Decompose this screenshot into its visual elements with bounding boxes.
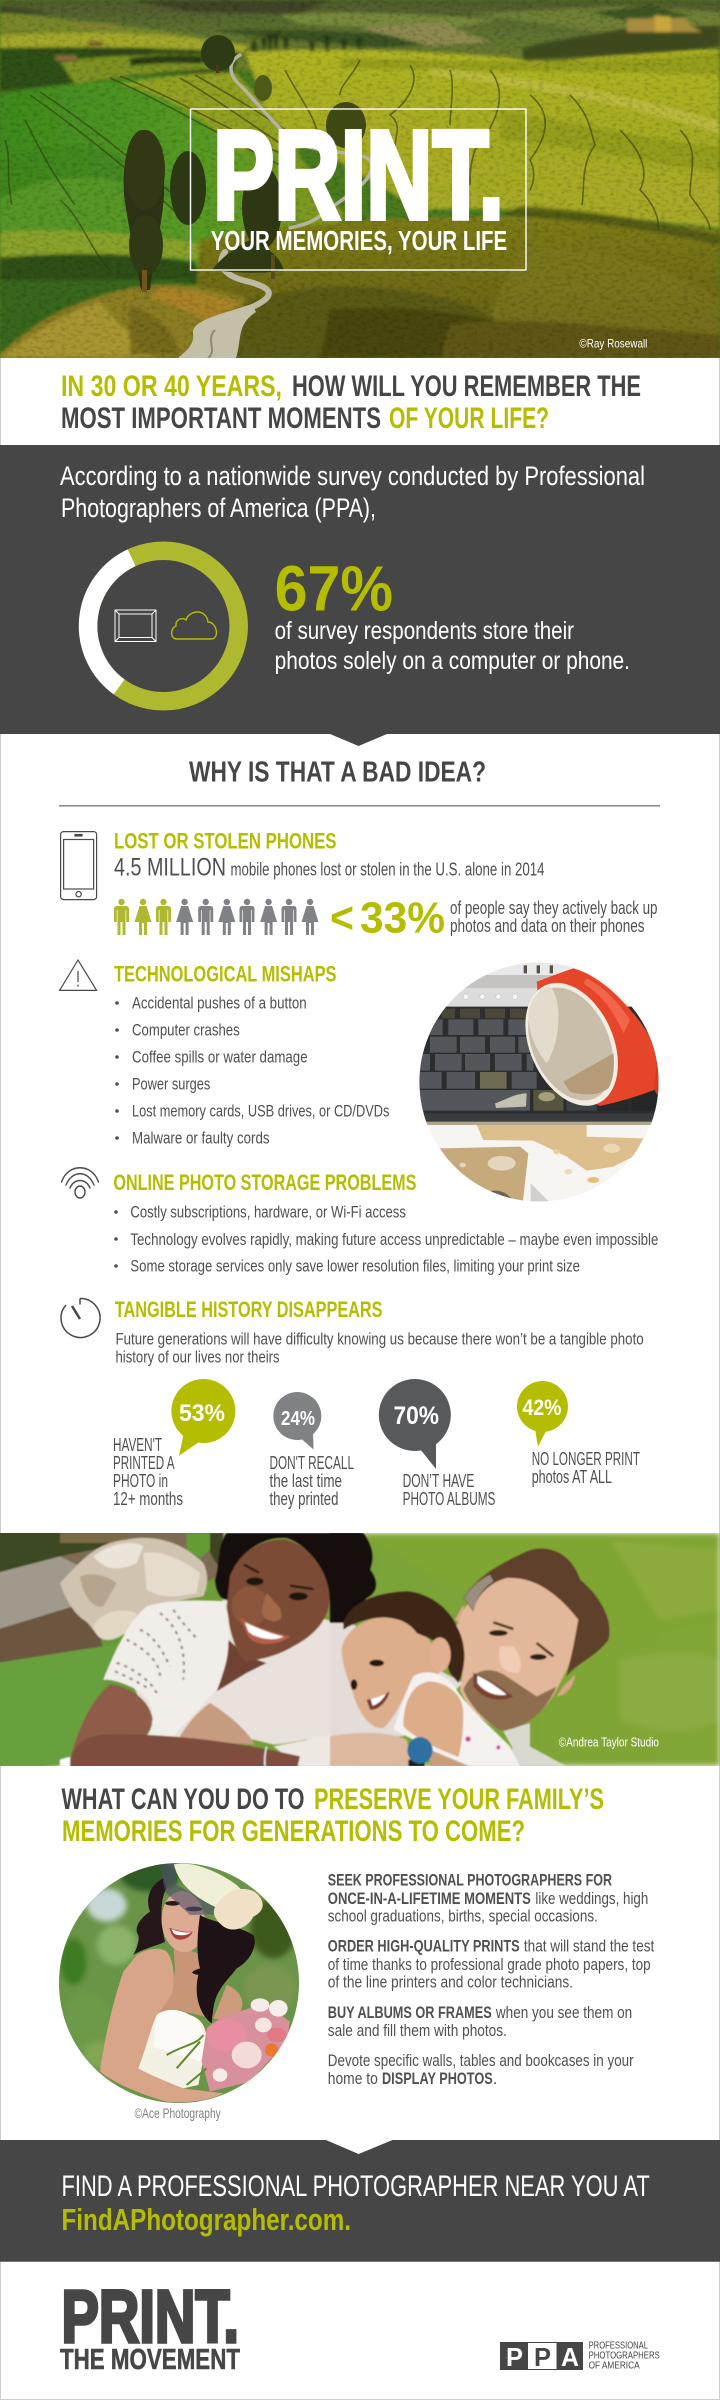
distant house and tree line xyxy=(0,6,720,61)
bullet list xyxy=(114,1204,658,1276)
advice: order high-quality prints: ORDER HIGH-QUALITY PRINTS xyxy=(328,1937,520,1956)
intro question heading xyxy=(61,370,641,435)
speech bubble: 42 percent xyxy=(517,1381,568,1447)
advice: order high-quality prints: that will stand the test xyxy=(524,1937,655,1956)
logo: PPA xyxy=(500,2340,660,2372)
face xyxy=(162,1891,205,1952)
advice: seek professional photographers xyxy=(328,1871,648,1926)
paragraph: history of our lives nor theirs xyxy=(116,1348,280,1367)
stat: 4.5 million phones: mobile phones lost or stolen in the U.S. alone in 2014 xyxy=(230,860,544,880)
logo: Print the Movement: THE MOVEMENT xyxy=(60,2344,240,2376)
survey intro text xyxy=(60,461,645,523)
speech bubble: 24 percent: 24% xyxy=(281,1408,315,1430)
label: 24 percent: DON'T RECALL xyxy=(270,1453,354,1473)
bullet list: Some storage services only save lower resolution files, limiting your print size xyxy=(130,1258,580,1276)
heading: why is that a bad idea: WHY IS THAT A BAD IDEA? xyxy=(189,757,486,789)
section: tangible history disappears xyxy=(61,1297,644,1509)
donut chart: 67 percent xyxy=(88,551,239,701)
speech bubble: 70 percent xyxy=(379,1379,451,1469)
PPA name: PHOTOGRAPHERS xyxy=(589,2350,660,2362)
heading: ONLINE PHOTO STORAGE PROBLEMS xyxy=(113,1170,416,1195)
speech bubble: 53 percent: 53% xyxy=(179,1400,225,1427)
advice: display photos xyxy=(328,2051,634,2088)
advice: buy albums or frames: when you see them on xyxy=(495,2003,632,2022)
photo credit: ©Ace Photography xyxy=(134,2105,221,2121)
photo: bride with bouquet xyxy=(57,1858,300,2105)
label: 70 percent xyxy=(403,1471,495,1509)
icon: photo frame xyxy=(115,610,156,642)
speech bubble: 70 percent: 70% xyxy=(394,1402,439,1430)
PPA name: PROFESSIONAL xyxy=(589,2340,648,2352)
label: 70 percent: PHOTO ALBUMS xyxy=(403,1489,495,1509)
veil xyxy=(160,1863,217,1915)
title frame xyxy=(190,109,526,270)
icon: cloud xyxy=(172,612,216,639)
panel: call to action band xyxy=(0,2140,720,2262)
hair right xyxy=(192,1915,255,2023)
label: 53 percent: PRINTED A xyxy=(113,1453,174,1473)
bullet list: Coffee spills or water damage xyxy=(132,1049,308,1067)
crochet cardigan xyxy=(103,1600,229,1740)
label: 24 percent: the last time xyxy=(270,1471,342,1491)
stat: less than 33 percent: < xyxy=(330,894,354,943)
icon: clock xyxy=(61,1298,100,1337)
rocks and grass behind mother xyxy=(0,1530,223,1773)
PPA letter boxes: A xyxy=(561,2342,579,2372)
mother's sleeve xyxy=(253,1738,306,1746)
bullet list: Malware or faulty cords xyxy=(132,1130,270,1148)
icon: warning triangle xyxy=(60,960,97,990)
label: 70 percent: DON’T HAVE xyxy=(403,1471,474,1491)
clothing backing xyxy=(134,1598,331,1741)
heading: what can you do: MEMORIES FOR GENERATIONS TO COME? xyxy=(62,1815,525,1848)
paragraph xyxy=(116,1330,644,1367)
stat: 4.5 million phones: 4.5 MILLION xyxy=(114,854,226,882)
father xyxy=(455,1549,609,1766)
advice: display photos: home to xyxy=(328,2069,378,2088)
father's arm and watch xyxy=(330,1733,470,1766)
advice: seek professional photographers: SEEK PROFESSIONAL PHOTOGRAPHERS FOR xyxy=(328,1871,612,1890)
shoulder and chest xyxy=(157,1945,213,2018)
intro question heading: IN 30 OR 40 YEARS, xyxy=(61,370,282,403)
label: 53 percent xyxy=(113,1435,183,1509)
stat: less than 33 percent: 33% xyxy=(360,894,445,943)
PPA letter boxes: P xyxy=(506,2342,523,2372)
bullet list xyxy=(115,995,389,1148)
photo: smiling family on grass xyxy=(0,1530,720,1773)
advice: buy albums or frames: BUY ALBUMS OR FRAMES xyxy=(328,2003,492,2022)
label: 53 percent: HAVEN'T xyxy=(113,1435,162,1455)
advice: order high-quality prints: of the line printers and color technicians. xyxy=(328,1973,573,1992)
photo: coffee spilled on keyboard xyxy=(417,960,663,1207)
tractor tracks in the fields xyxy=(5,60,710,270)
statistic caption: photos solely on a computer or phone. xyxy=(275,647,630,675)
bullet list: Lost memory cards, USB drives, or CD/DVDs xyxy=(132,1103,389,1121)
advice: buy albums or frames: sale and fill them with photos. xyxy=(328,2021,507,2040)
bullet list: Costly subscriptions, hardware, or Wi-Fi access xyxy=(130,1204,406,1222)
section: lost or stolen phones xyxy=(61,829,658,943)
speech bubble: 24 percent xyxy=(273,1392,321,1450)
advice: seek professional photographers: school graduations, births, special occasions. xyxy=(328,1907,598,1926)
bullet list: Computer crashes xyxy=(132,1022,240,1040)
heading: what can you do xyxy=(62,1783,604,1848)
advice: display photos: . xyxy=(493,2069,497,2088)
speech bubble: 53 percent xyxy=(171,1379,235,1456)
advice: order high-quality prints xyxy=(328,1937,655,1992)
advice: seek professional photographers: like weddings, high xyxy=(535,1889,648,1908)
cypress trees xyxy=(124,35,366,292)
blurred garden background xyxy=(60,1858,297,2068)
label: 53 percent: PHOTO in xyxy=(113,1471,168,1491)
bouquet xyxy=(167,1998,290,2092)
stat: 4.5 million phones xyxy=(114,854,544,882)
PPA letter boxes xyxy=(500,2342,583,2372)
logo: Print the Movement xyxy=(60,2275,240,2376)
heading: what can you do: PRESERVE YOUR FAMILY’S xyxy=(314,1783,604,1816)
section: online photo storage problems xyxy=(62,1168,658,1276)
dress xyxy=(138,2010,207,2088)
label: 42 percent xyxy=(532,1449,640,1487)
mother xyxy=(0,1530,360,1773)
bullet list: Accidental pushes of a button xyxy=(132,995,307,1013)
photo credit: ©Ray Rosewall xyxy=(579,336,647,350)
heading: what can you do: WHAT CAN YOU DO TO xyxy=(62,1783,304,1816)
label: 42 percent: photos AT ALL xyxy=(532,1467,612,1487)
advice: seek professional photographers: ONCE-IN-A-LIFETIME MOMENTS xyxy=(328,1889,531,1908)
title: PRINT.: PRINT. xyxy=(213,104,504,246)
bullet list: Power surges xyxy=(132,1076,210,1094)
stat caption: photos and data on their phones xyxy=(450,916,645,936)
survey intro text: Photographers of America (PPA), xyxy=(61,493,376,523)
subtitle: YOUR MEMORIES, YOUR LIFE xyxy=(211,225,507,256)
intro question heading: MOST IMPORTANT MOMENTS xyxy=(61,402,381,435)
icon: wifi xyxy=(62,1168,98,1198)
heading: LOST OR STOLEN PHONES xyxy=(114,829,336,854)
section: technological mishaps xyxy=(60,960,663,1207)
hero photo: rolling Tuscan hills with title xyxy=(0,0,720,358)
hat xyxy=(174,1864,241,1907)
label: 24 percent: they printed xyxy=(270,1489,338,1509)
logo: Print the Movement: PRINT. xyxy=(62,2275,239,2358)
PPA name: OF AMERICA xyxy=(589,2360,640,2372)
heading: TECHNOLOGICAL MISHAPS xyxy=(114,962,336,987)
father and toddler xyxy=(330,1533,609,1766)
statistic caption: of survey respondents store their xyxy=(275,617,574,645)
stat caption xyxy=(450,898,658,936)
red mug xyxy=(525,968,658,1106)
advice text block xyxy=(328,1871,655,2088)
panel: survey statistic band xyxy=(0,445,720,746)
toddler xyxy=(342,1591,520,1766)
advice: buy albums or frames xyxy=(328,2003,632,2040)
photo credit: ©Andrea Taylor Studio xyxy=(559,1736,659,1750)
PPA name xyxy=(589,2340,660,2372)
grass background xyxy=(0,1533,720,1766)
icon: phone xyxy=(61,832,97,900)
big 67 percent: 67% xyxy=(275,553,393,625)
pictogram: people, three of ten highlighted xyxy=(114,899,318,935)
label: 24 percent xyxy=(270,1453,354,1509)
speech bubble: 42 percent: 42% xyxy=(522,1395,562,1420)
statistic caption xyxy=(275,617,630,675)
landscape background xyxy=(0,0,720,358)
website: FindAPhotographer.com. xyxy=(62,2202,351,2237)
mother's hair edge xyxy=(330,1533,376,1626)
winding road xyxy=(178,55,372,358)
advice: display photos: Devote specific walls, tables and bookcases in your xyxy=(328,2051,634,2070)
advice: display photos: DISPLAY PHOTOS xyxy=(382,2069,493,2088)
heading: TANGIBLE HISTORY DISAPPEARS xyxy=(115,1297,383,1322)
hair left xyxy=(133,1878,167,1955)
label: 42 percent: NO LONGER PRINT xyxy=(532,1449,640,1469)
PPA letter boxes: P xyxy=(534,2342,551,2372)
label: 53 percent: 12+ months xyxy=(113,1489,183,1509)
intro question heading: OF YOUR LIFE? xyxy=(389,402,549,435)
